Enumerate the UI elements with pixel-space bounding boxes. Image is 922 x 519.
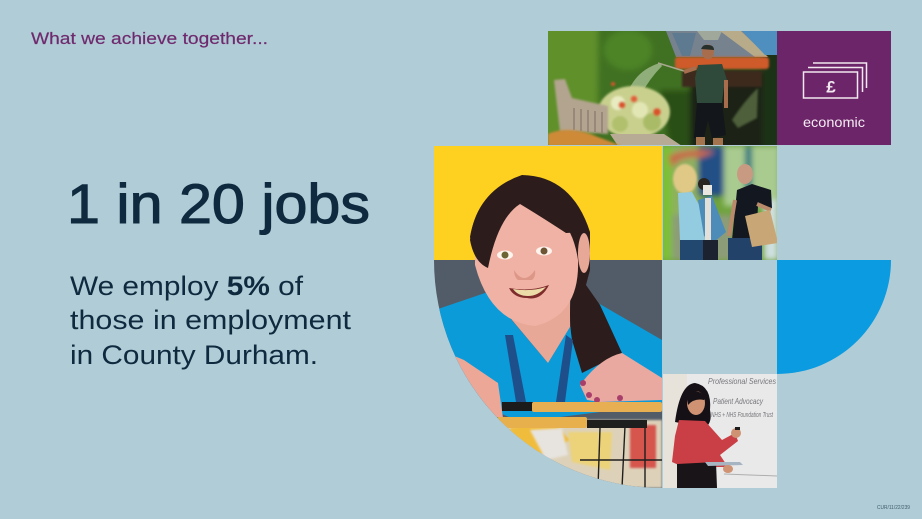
- ear: [578, 233, 590, 273]
- whiteboard writing: Professional Services: [708, 376, 777, 386]
- whiteboard writing: Patient Advocacy: [713, 396, 764, 406]
- water spray: [630, 64, 662, 88]
- red jumper: [672, 420, 738, 467]
- panel: economic: [777, 31, 891, 145]
- woman's hair: [675, 383, 711, 426]
- whiteboard writing: [708, 378, 776, 417]
- spiky plant: [732, 88, 758, 128]
- hand: [731, 428, 741, 438]
- grey wall: [434, 260, 662, 488]
- whiteboard writing: NHS + NHS Foundation Trust: [711, 410, 774, 419]
- body text: We employ 5% of: [70, 271, 304, 301]
- bench: [554, 79, 608, 134]
- path: [610, 134, 680, 145]
- icon: banknotes with pound sign: £: [826, 78, 836, 96]
- man in blue jacket: [698, 196, 726, 242]
- flower bed: [598, 82, 670, 138]
- arms and hands: [452, 355, 503, 418]
- man with bag: [737, 164, 753, 184]
- fringe: [470, 200, 570, 268]
- body text: those in employment: [70, 305, 352, 335]
- nose: [514, 270, 535, 280]
- hair back and ponytail: [470, 175, 622, 373]
- smile: [509, 285, 549, 298]
- foreground orange flowers: [548, 130, 622, 146]
- eyes: [497, 250, 513, 260]
- body text: [70, 271, 352, 370]
- body text: in County Durham.: [70, 340, 318, 370]
- neck: [512, 301, 570, 363]
- basket handles: [502, 402, 533, 411]
- photo: gardener watering flowers: [548, 31, 777, 145]
- window box flowers: [675, 57, 769, 69]
- face: [475, 200, 578, 326]
- gardener: [684, 44, 727, 146]
- reference code: CUR/11/22/239: [877, 505, 910, 511]
- heading: what we achieve together: What we achieve together...: [31, 29, 268, 48]
- greenhouse roof: [666, 31, 770, 57]
- yellow background: [434, 146, 662, 260]
- blue quarter circle: [777, 260, 891, 374]
- lanyard: [505, 335, 573, 402]
- headline statistic: 1 in 20 jobs: [67, 172, 370, 235]
- shopping basket contents: [500, 420, 662, 488]
- woman's face: [687, 391, 705, 415]
- blue t-shirt: [432, 292, 662, 422]
- woman in light blue: [673, 164, 697, 194]
- label: economic: economic: [803, 115, 865, 130]
- skirt: [677, 462, 717, 488]
- hedges: [548, 31, 777, 145]
- photo: people talking at event: [660, 146, 779, 260]
- folder: [705, 462, 743, 466]
- photo: smiling woman with shopping basket: [432, 146, 662, 488]
- photo: woman at whiteboard: [663, 374, 777, 488]
